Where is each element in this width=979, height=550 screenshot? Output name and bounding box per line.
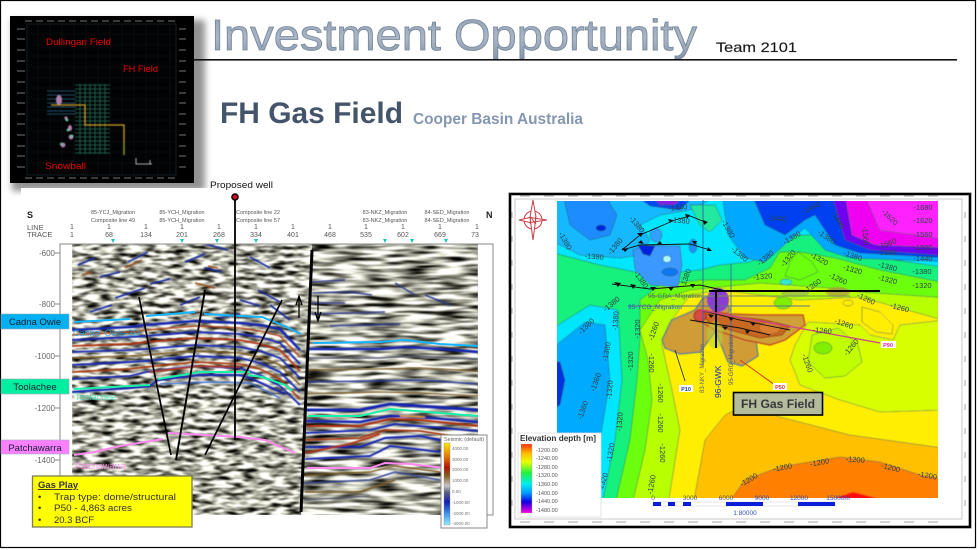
- contour labels: -1320: [626, 351, 635, 371]
- contour labels: -1440: [913, 254, 933, 263]
- contour labels: -1200: [772, 461, 793, 474]
- reflectors left of fault: [72, 244, 300, 405]
- label: Toolachee: [1, 379, 69, 394]
- team label: Team 2101: [716, 39, 797, 55]
- depth axis: -1000: [35, 352, 56, 361]
- callout: FH Gas Field: FH Gas Field: [741, 397, 815, 411]
- legend: elevation depth: -1280.00: [536, 465, 558, 471]
- section header labels: 1: [70, 224, 74, 231]
- section header labels: Composite line 57: [236, 218, 280, 224]
- contour labels: -1380: [670, 215, 690, 226]
- contour labels: -1260: [656, 413, 665, 433]
- section header labels: 1: [107, 224, 111, 231]
- contour labels: -1380: [842, 248, 863, 263]
- section header labels: 669: [434, 232, 446, 239]
- section header labels: 201: [176, 232, 188, 239]
- section header labels: 535: [360, 232, 372, 239]
- heading: FH Gas Field: FH Gas Field: [220, 97, 403, 130]
- section header labels: 83-NKZ_Migration: [363, 210, 407, 216]
- seismic line names: [628, 293, 735, 398]
- seismic amplitude legend: 3000.00: [452, 457, 469, 462]
- scale bar: 12000: [790, 495, 808, 502]
- contour labels: -1440: [800, 200, 822, 216]
- line tie markers: [111, 239, 448, 243]
- depth axis: -1200: [35, 404, 56, 413]
- legend: elevation depth: -1360.00: [536, 482, 558, 488]
- seismic amplitude legend: Seismic (default): [444, 437, 484, 443]
- callout: gas play: •: [38, 492, 41, 503]
- contour labels: -1440: [668, 202, 688, 213]
- legend: elevation depth: -1480.00: [536, 508, 558, 514]
- contour labels: -1260: [827, 271, 849, 287]
- label: Cadna Owie: Cadna Owie: [9, 317, 61, 328]
- contour labels: -1440: [829, 209, 847, 230]
- contour labels: -1320: [595, 472, 610, 493]
- icon: north arrow: N: [529, 215, 537, 227]
- contour labels: -1380: [678, 268, 693, 289]
- contour labels: -1380: [584, 251, 604, 262]
- well labels: P50: [775, 385, 785, 391]
- gas field polygons: [662, 287, 850, 366]
- contour labels: -1380: [605, 236, 625, 257]
- contour labels: [556, 200, 938, 495]
- contour labels: -1320: [778, 248, 798, 269]
- well labels: P90: [883, 343, 893, 349]
- seismic amplitude legend: 2000.00: [452, 467, 469, 472]
- reflectors right of fault: [305, 280, 478, 500]
- contour labels: -1380: [632, 269, 650, 290]
- callout: gas play: 20.3 BCF: [54, 515, 94, 526]
- proposed well: Proposed well: [210, 180, 273, 191]
- contour labels: -1380: [556, 230, 574, 251]
- horizon name: Cadna_Owie-3D: Cadna_Owie-3D: [73, 328, 140, 338]
- section header labels: 85-YCH_Migration: [159, 218, 205, 224]
- P-outline arrows: [675, 310, 880, 385]
- section header labels: 1: [291, 224, 295, 231]
- contour labels: -1380: [600, 341, 613, 362]
- section header labels: 401: [287, 232, 299, 239]
- seismic data image: [72, 244, 478, 515]
- well cross: [709, 291, 880, 348]
- fault barb lines: [612, 214, 790, 335]
- section header labels: 84-SED_Migration: [425, 218, 469, 224]
- contour labels: -1260: [647, 353, 656, 373]
- contour labels: -1320: [842, 263, 863, 276]
- depth axis: -1400: [35, 456, 56, 465]
- callout: gas play: •: [38, 515, 41, 526]
- scale bar: 0: [651, 495, 655, 502]
- contour labels: -1260: [889, 301, 910, 314]
- contour labels: -1320: [614, 412, 625, 432]
- contour labels: -1380: [912, 267, 932, 276]
- contour labels: -1320: [809, 250, 830, 268]
- section header labels: 602: [397, 232, 409, 239]
- section header labels: 73: [471, 232, 479, 239]
- fault lines: [139, 250, 321, 512]
- contour labels: -1380: [601, 294, 622, 314]
- contour labels: -1380: [576, 316, 596, 336]
- contour labels: -1260: [645, 474, 658, 495]
- contour labels: -1260: [656, 383, 665, 403]
- section header labels: 83-NKZ_Migration: [363, 218, 407, 224]
- section header labels: 85-YCJ_Migration: [91, 210, 135, 216]
- seismic line traces: [628, 200, 850, 365]
- scale bar: 6000: [719, 495, 734, 502]
- contour labels: -1320: [633, 319, 642, 339]
- seismic amplitude legend: 1000.00: [452, 478, 469, 483]
- callout: gas play: P50 - 4,863 acres: [54, 503, 132, 514]
- horizon name: Patchawarra: Patchawarra: [75, 461, 126, 471]
- panel: depth structure map: [510, 194, 970, 527]
- seismic amplitude legend: 4000.00: [452, 446, 469, 451]
- contour labels: -1320: [604, 380, 615, 400]
- label: Dullingari Field: Dullingari Field: [46, 37, 111, 48]
- section header labels: 1: [144, 224, 148, 231]
- contour labels: -1320: [912, 281, 932, 290]
- depth axis: -600: [39, 249, 56, 258]
- label: Patchawarra: [1, 440, 69, 454]
- section header labels: Composite line 22: [236, 210, 280, 216]
- callout: gas play: [32, 476, 192, 527]
- section header labels: 1: [70, 232, 74, 239]
- section header labels: 1: [401, 224, 405, 231]
- label: FH Field: FH Field: [123, 64, 158, 75]
- scale bar: [651, 495, 850, 517]
- contour labels: -1200: [845, 454, 865, 465]
- horizon name: Toolachee: Toolachee: [75, 392, 116, 402]
- contour labels: -1380: [877, 260, 898, 273]
- contour labels: -1260: [855, 291, 877, 307]
- scale bar: 15000m: [826, 495, 850, 502]
- contour labels: -1380: [816, 228, 837, 246]
- callout: FH Gas Field: [734, 392, 822, 415]
- section header labels: 1: [217, 224, 221, 231]
- seismic amplitude legend: [441, 435, 487, 528]
- contour labels: -1380: [755, 248, 776, 268]
- scale bar: 3000: [683, 495, 698, 502]
- contour labels: -1560: [913, 230, 933, 239]
- section header labels: 1: [180, 224, 184, 231]
- contour labels: -1620: [913, 216, 933, 225]
- section header labels: N: [486, 210, 492, 220]
- seismic amplitude legend: 0.00: [452, 489, 461, 494]
- section header labels: 334: [250, 232, 262, 239]
- frame ticks: [512, 196, 965, 522]
- horizon: Toolachee: [74, 372, 478, 416]
- legend: elevation depth: -1440.00: [536, 499, 558, 505]
- contour labels: -1500: [877, 248, 897, 257]
- title: Investment Opportunity: [211, 11, 697, 60]
- contour labels: -1260: [646, 321, 661, 342]
- seismic line names: 95-YCG_Migration: [628, 304, 682, 311]
- contour fill map: [550, 195, 950, 505]
- white strip below map: [601, 498, 943, 518]
- depth axis: -800: [39, 300, 56, 309]
- label: Cadna Owie: [1, 314, 69, 329]
- contour labels: -1260: [658, 443, 667, 463]
- subheading: Cooper Basin Australia: Cooper Basin Australia: [413, 111, 583, 128]
- section header labels: TRACE: [27, 230, 52, 239]
- legend: elevation depth: [518, 433, 601, 517]
- section header labels: 1: [438, 224, 442, 231]
- contour labels: -1320: [877, 273, 898, 286]
- well labels: P10: [681, 387, 691, 393]
- seismic amplitude legend: -2000.00: [452, 511, 470, 516]
- title rule: [194, 59, 957, 61]
- section header labels: Composite line 49: [91, 218, 135, 224]
- seismic line names: 83-NKY_Migration: [700, 344, 706, 393]
- contour labels: -1560: [860, 226, 871, 246]
- contour labels: -1360: [575, 400, 590, 421]
- section header labels: 1: [328, 224, 332, 231]
- contour labels: -1620: [880, 207, 900, 227]
- section header labels: 1: [254, 224, 258, 231]
- icon: north arrow: [519, 200, 547, 240]
- contour labels: -1320: [753, 271, 773, 282]
- contour labels: -1380: [610, 311, 621, 331]
- section header labels: S: [27, 210, 33, 220]
- section header labels: LINE: [27, 223, 44, 232]
- well labels: [679, 341, 896, 393]
- seismic survey grid: [47, 84, 152, 164]
- section header labels: 1: [364, 224, 368, 231]
- contour labels: -1200: [917, 469, 938, 482]
- seismic amplitude legend: -1000.00: [452, 500, 470, 505]
- contour labels: -1260: [800, 353, 815, 374]
- legend: elevation depth: -1400.00: [536, 491, 558, 497]
- horizon: Patchawarra: [74, 433, 445, 468]
- contour labels: -1380: [719, 218, 737, 239]
- section header labels: 468: [324, 232, 336, 239]
- contour labels: -1260: [812, 325, 832, 336]
- seismic line names: 95-GRC_Migration: [729, 335, 735, 385]
- contour labels: -1440: [767, 213, 787, 224]
- section header labels: 68: [105, 232, 113, 239]
- legend: elevation depth: Elevation depth [m]: [520, 434, 596, 443]
- seismic line names: 96-GWK: [713, 365, 723, 398]
- contour labels: -1680: [913, 203, 933, 212]
- contour labels: -1380: [781, 229, 802, 247]
- section header labels: 85-YCH_Migration: [159, 210, 205, 216]
- section header labels: 134: [140, 232, 152, 239]
- section header labels: 84-SED_Migration: [425, 210, 469, 216]
- panel: seismic section: [1, 180, 493, 528]
- contour labels: -1200: [738, 471, 759, 489]
- scale bar: 1:80000: [733, 510, 757, 517]
- contour labels: -1560: [877, 236, 898, 251]
- legend: elevation depth: -1240.00: [536, 456, 558, 462]
- depth axis: [35, 249, 60, 465]
- seismic amplitude legend: -3000.00: [452, 521, 470, 526]
- horizon: Cadna Owie: [74, 312, 478, 346]
- contour labels: -1260: [841, 337, 861, 358]
- contour labels: -1380: [627, 214, 647, 235]
- contour labels: -1200: [880, 461, 901, 474]
- axes frame: [60, 244, 493, 515]
- label: Patchawarra: Patchawarra: [8, 443, 62, 454]
- contour labels: -1500: [913, 243, 933, 252]
- contour labels: -1260: [833, 316, 854, 331]
- contour labels: -1360: [588, 372, 603, 393]
- panel: field location map: [10, 16, 205, 191]
- legend: elevation depth: -1320.00: [536, 473, 558, 479]
- contour labels: -1200: [809, 456, 830, 469]
- seismic line names: 95-GRA_Migration: [648, 293, 702, 300]
- legend: elevation depth: -1200.00: [536, 448, 558, 454]
- contour labels: -1320: [604, 442, 617, 463]
- label: Snowball: Snowball: [45, 161, 86, 172]
- section header labels: 268: [213, 232, 225, 239]
- contour labels: -1260: [802, 277, 823, 295]
- section header labels: 1: [475, 224, 479, 231]
- label: Toolachee: Toolachee: [13, 382, 57, 393]
- callout: gas play: Trap type: dome/structural: [54, 492, 176, 503]
- proposed well: [210, 180, 273, 440]
- callout: gas play: •: [38, 503, 41, 514]
- scale bar: 9000: [755, 495, 770, 502]
- contour labels: -1380: [729, 244, 750, 264]
- callout: gas play: Gas Play: [38, 480, 79, 491]
- section header labels: [27, 210, 492, 239]
